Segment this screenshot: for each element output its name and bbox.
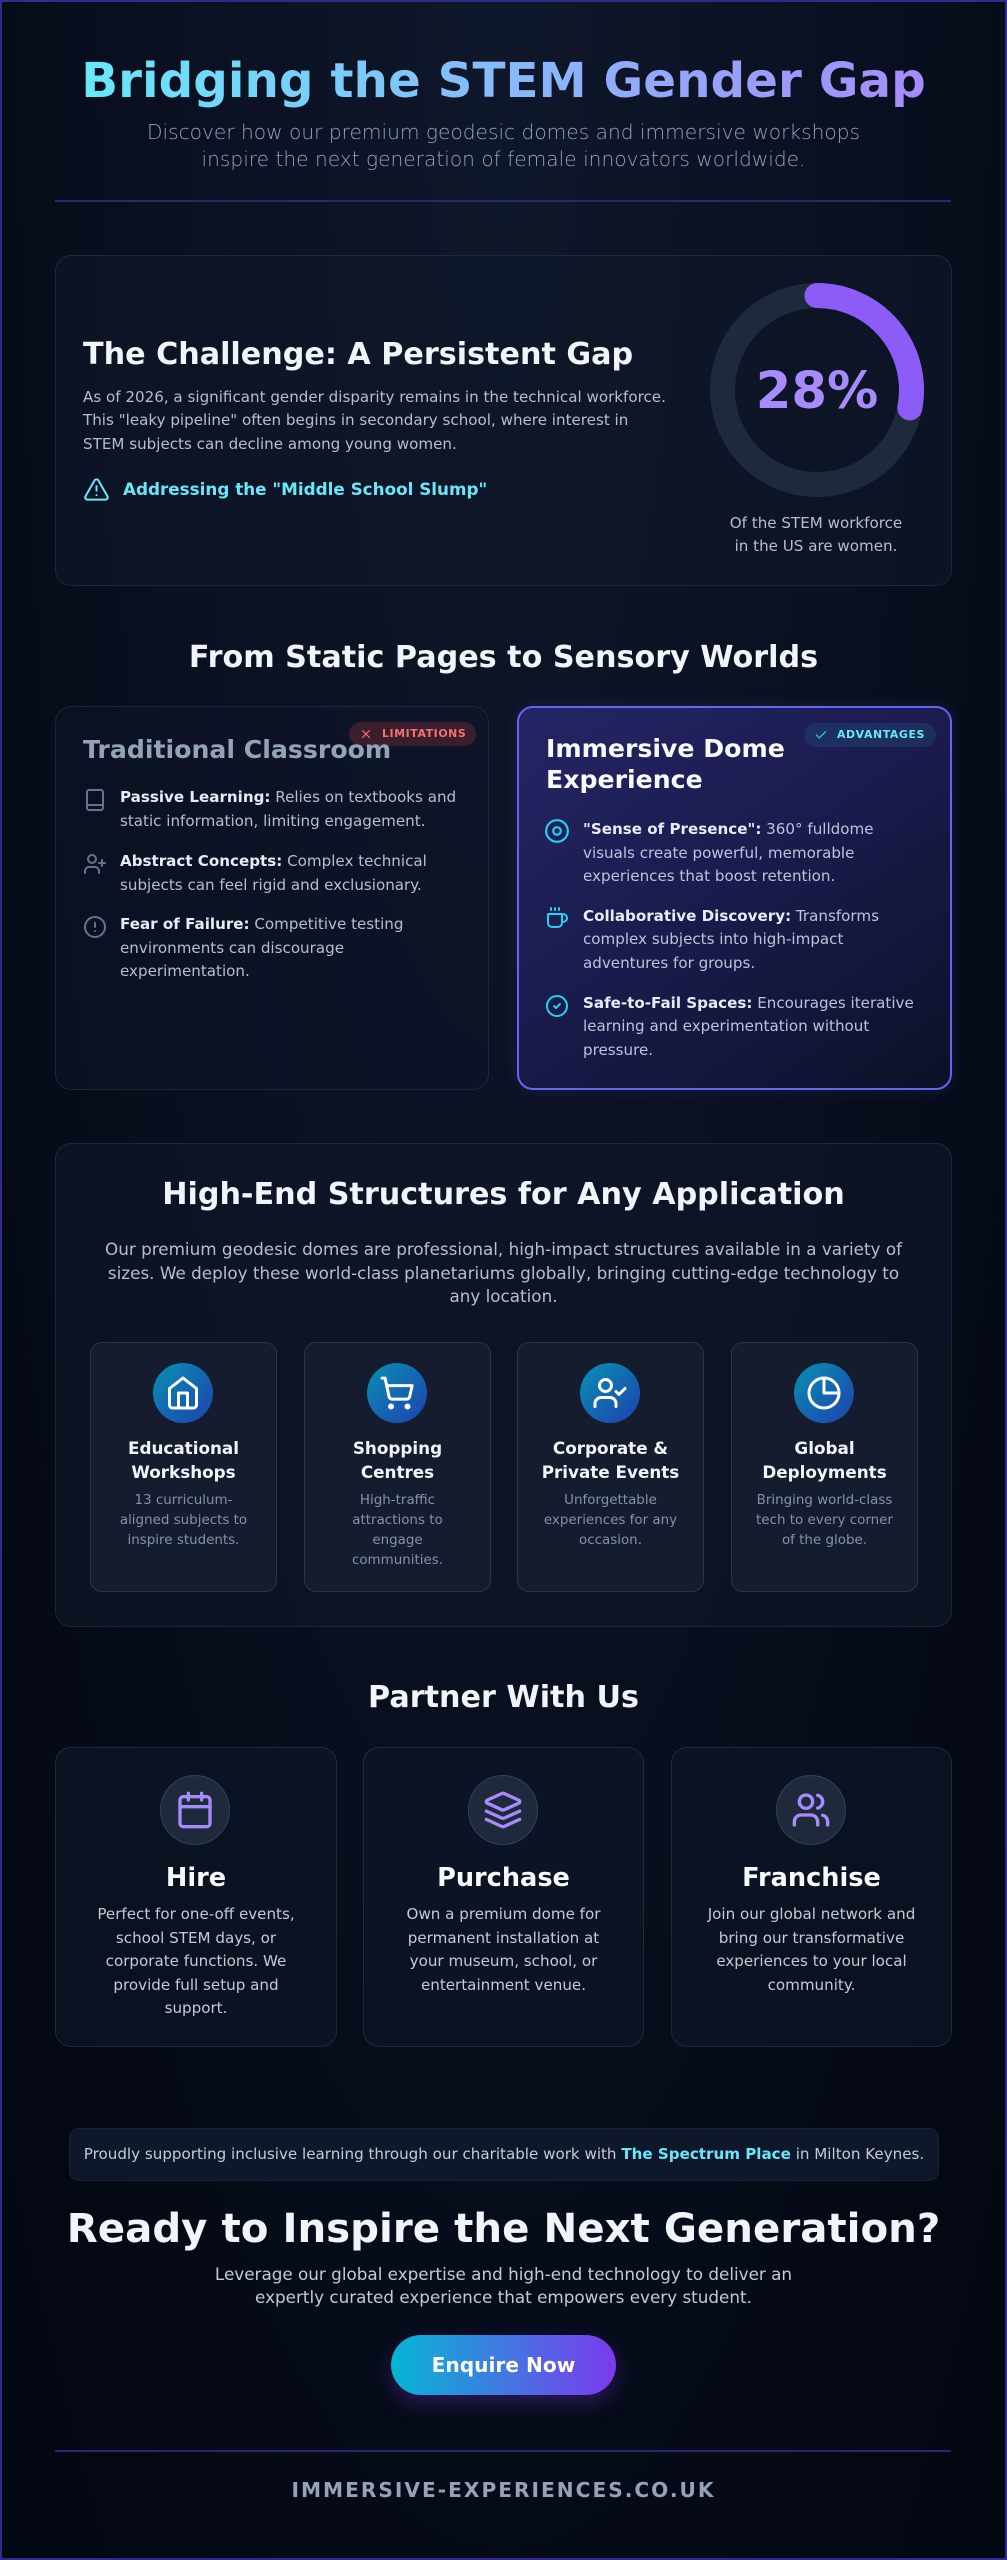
purchase text: entertainment venue. [421, 1976, 586, 1994]
card: global deployments [731, 1342, 918, 1592]
icon: user check [580, 1363, 640, 1423]
card title [353, 1438, 442, 1482]
subtitle [147, 120, 860, 170]
purchase text: Own a premium dome for [407, 1905, 600, 1923]
card title [762, 1438, 887, 1482]
item: passive learning [120, 788, 456, 830]
challenge text: This "leaky pipeline" often begins in secondary school, where interest in [83, 411, 628, 429]
button: enquire now: Enquire Now [432, 2353, 575, 2377]
donut value: 28% [756, 361, 878, 421]
hire text: provide full setup and [113, 1976, 279, 1994]
immersive heading: Immersive Dome [546, 734, 785, 763]
challenge text: As of 2026, a significant gender disparity remains in the technical workforce. [83, 388, 666, 406]
card title: Shopping [353, 1438, 442, 1458]
item: collaborative discovery: Collaborative Discovery: Transforms [583, 906, 879, 924]
card title: Centres [361, 1462, 434, 1482]
card text: Bringing world-class [757, 1493, 892, 1508]
purchase text: your museum, school, or [410, 1952, 597, 1970]
franchise text: bring our transformative [719, 1928, 904, 1946]
card title [128, 1438, 239, 1482]
item: abstract concepts: subjects can feel rigid and exclusionary. [120, 876, 422, 894]
item: sense of presence: "Sense of Presence": 360° fulldome [583, 820, 874, 838]
card text: occasion. [579, 1533, 642, 1548]
advantages badge [804, 723, 936, 747]
structures intro text: any location. [449, 1286, 558, 1306]
card text: engage [372, 1533, 423, 1548]
card title: Educational [128, 1438, 239, 1458]
challenge heading: The Challenge: A Persistent Gap [83, 337, 633, 372]
item: collaborative discovery [583, 906, 879, 972]
icon: warning triangle [84, 478, 109, 501]
card text [352, 1493, 443, 1568]
item: safe to fail: Safe-to-Fail Spaces: Encourages iterative [583, 994, 914, 1012]
card title: Global [794, 1438, 855, 1458]
card: purchase [363, 1747, 644, 2047]
callout: middle school slump [84, 478, 487, 501]
card: corporate and private events [517, 1342, 704, 1592]
icon: layers [468, 1775, 538, 1845]
donut caption [730, 514, 902, 555]
hire text [97, 1905, 295, 2017]
item: safe to fail: pressure. [583, 1040, 653, 1058]
cta text: Leverage our global expertise and high-end technology to deliver an [215, 2264, 792, 2284]
card text [120, 1493, 247, 1548]
icon: check circle [546, 995, 568, 1017]
icon: home [153, 1363, 213, 1423]
franchise text: Join our global network and [708, 1905, 915, 1923]
hire text: support. [165, 1999, 227, 2017]
item: abstract concepts [120, 852, 427, 894]
subtitle: inspire the next generation of female innovators worldwide. [202, 146, 805, 170]
item: sense of presence [583, 820, 874, 885]
panel: traditional classroom [55, 706, 489, 1090]
icon: user plus [84, 854, 106, 874]
card title: Private Events [542, 1462, 679, 1482]
donut caption: in the US are women. [735, 537, 897, 555]
card text [544, 1493, 677, 1548]
icon: alert circle [84, 916, 106, 938]
challenge text [82, 388, 666, 453]
hire text: corporate functions. We [106, 1952, 286, 1970]
franchise text: community. [768, 1976, 855, 1994]
badge label: ADVANTAGES [837, 728, 925, 741]
donut caption: Of the STEM workforce [730, 514, 902, 532]
subtitle: Discover how our premium geodesic domes and immersive workshops [147, 120, 860, 144]
card: educational workshops [90, 1342, 277, 1592]
structures intro text: sizes. We deploy these world-class planetariums globally, bringing cutting-edge technology to [108, 1262, 899, 1282]
button: enquire now [391, 2335, 616, 2395]
card text: communities. [352, 1553, 443, 1568]
card: franchise [671, 1747, 952, 2047]
limitations badge [349, 722, 476, 746]
card text: tech to every corner [756, 1513, 893, 1528]
item: passive learning: static information, limiting engagement. [120, 812, 425, 830]
icon: book [86, 789, 104, 811]
card title [542, 1438, 679, 1482]
cta text [215, 2264, 792, 2307]
cta text: expertly curated experience that empowers every student. [255, 2287, 752, 2307]
panel: immersive dome experience [517, 706, 952, 1090]
card text: attractions to [352, 1513, 443, 1528]
item: abstract concepts: Abstract Concepts: Complex technical [120, 852, 427, 870]
icon: check [816, 730, 826, 738]
card text: experiences for any [544, 1513, 677, 1528]
item: fear of failure: experimentation. [120, 962, 250, 980]
structures intro text [105, 1239, 902, 1306]
footer url: IMMERSIVE-EXPERIENCES.CO.UK [291, 2478, 716, 2502]
franchise text [706, 1905, 915, 1994]
card text [756, 1493, 893, 1548]
hire text: school STEM days, or [116, 1928, 276, 1946]
card text: 13 curriculum- [135, 1493, 232, 1508]
heading: structures: High-End Structures for Any Application [162, 1176, 845, 1212]
hire text: Perfect for one-off events, [97, 1905, 295, 1923]
card text: inspire students. [128, 1533, 239, 1548]
badge label: LIMITATIONS [382, 727, 466, 740]
item: sense of presence: experiences that boost retention. [583, 867, 835, 885]
icon: cross [362, 730, 370, 738]
heading: comparison: From Static Pages to Sensory Worlds [189, 640, 818, 674]
card: hire [55, 1747, 337, 2047]
item: collaborative discovery: adventures for groups. [583, 954, 755, 972]
immersive heading: Experience [546, 765, 703, 794]
item: fear of failure: environments can discourage [120, 938, 344, 956]
card title: Deployments [762, 1462, 887, 1482]
item: fear of failure: Fear of Failure: Competitive testing [120, 915, 403, 933]
heading: partner with us: Partner With Us [368, 1680, 639, 1714]
panel: high-end structures [55, 1143, 952, 1627]
franchise title: Franchise [742, 1863, 881, 1893]
item: fear of failure [120, 915, 403, 980]
immersive heading [546, 734, 785, 794]
challenge text: STEM subjects can decline among young women. [83, 435, 457, 453]
item: safe to fail [583, 994, 914, 1058]
icon: pie chart [794, 1363, 854, 1423]
icon: cart [367, 1363, 427, 1423]
card text: High-traffic [360, 1493, 435, 1508]
icon: target [545, 819, 569, 843]
icon: users [776, 1775, 846, 1845]
donut chart: 28% [710, 283, 924, 497]
purchase text [407, 1905, 600, 1994]
purchase text: permanent installation at [408, 1928, 599, 1946]
traditional heading: Traditional Classroom [83, 735, 391, 764]
icon: coffee cup [547, 907, 568, 928]
card text: Unforgettable [564, 1493, 657, 1508]
item: sense of presence: visuals create powerful, memorable [583, 844, 854, 862]
card text: aligned subjects to [120, 1513, 247, 1528]
card title: Workshops [131, 1462, 236, 1482]
charity note [69, 2128, 939, 2181]
card title: Corporate & [553, 1438, 668, 1458]
card: shopping centres [304, 1342, 491, 1592]
structures intro text: Our premium geodesic domes are professional, high-impact structures available in a variety of [105, 1239, 902, 1259]
charity note: Proudly supporting inclusive learning through our charitable work with The Spectrum Place in Milton Keynes. [84, 2145, 924, 2163]
panel: challenge [55, 255, 952, 586]
item: passive learning: Passive Learning: Relies on textbooks and [120, 788, 456, 806]
title: Bridging the STEM Gender Gap [81, 53, 926, 109]
card text: of the globe. [782, 1533, 867, 1548]
cta heading: Ready to Inspire the Next Generation? [67, 2205, 940, 2252]
franchise text: experiences to your local [716, 1952, 907, 1970]
purchase title: Purchase [437, 1863, 570, 1893]
item: collaborative discovery: complex subjects into high-impact [583, 930, 843, 948]
hire title: Hire [166, 1863, 226, 1893]
item: safe to fail: learning and experimentation without [583, 1017, 869, 1035]
callout text: Addressing the "Middle School Slump" [123, 479, 487, 499]
icon: calendar [160, 1775, 230, 1845]
